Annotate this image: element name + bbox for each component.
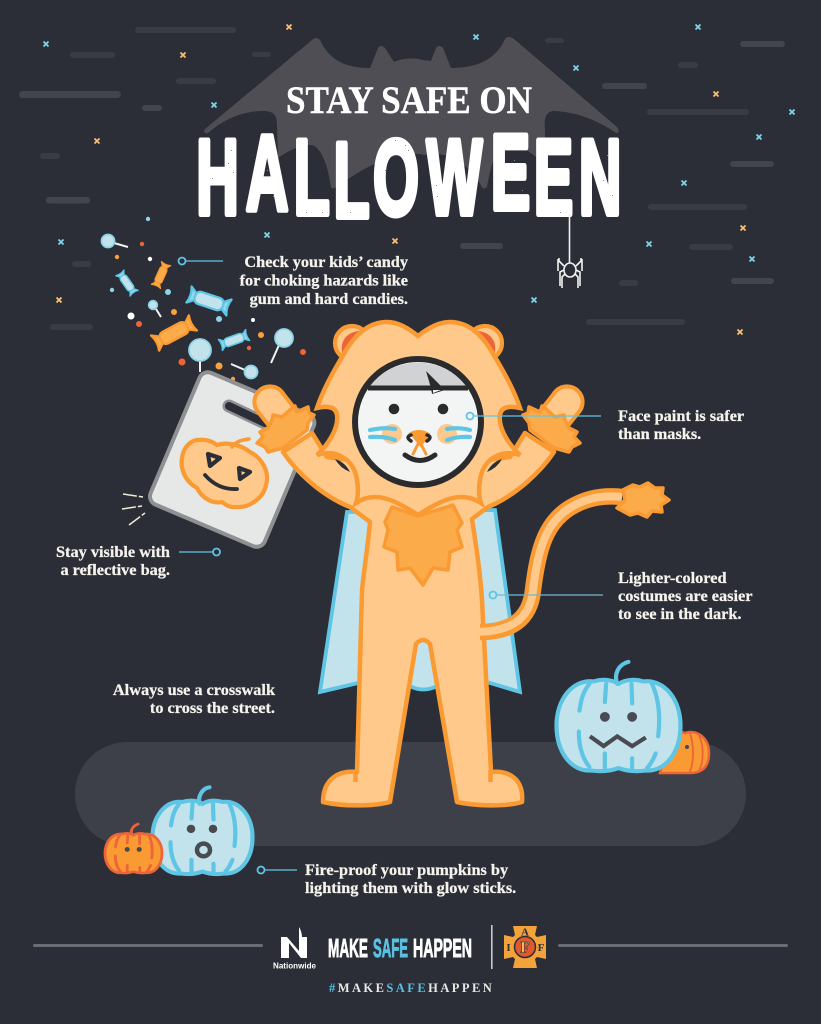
- face paint stripes: [370, 428, 470, 440]
- wrapped candies: [116, 262, 250, 351]
- callout: face paint: [466, 406, 744, 443]
- cape: [320, 510, 520, 692]
- candy spill: [102, 217, 306, 381]
- callout: reflective bag: a reflective bag.: [60, 560, 170, 579]
- logo: IAFF maltese cross: F: [538, 942, 545, 954]
- callout: lighter costumes: Lighter-colored: [618, 568, 727, 587]
- callout: candy check: gum and hard candies.: [250, 289, 408, 308]
- logo: IAFF maltese cross: I: [506, 942, 511, 954]
- kid in lion costume: [254, 322, 669, 805]
- ground: rounded street: [75, 742, 746, 846]
- mouth: [405, 455, 435, 460]
- lion tail: [474, 496, 622, 632]
- hashtag: #MAKESAFEHAPPEN: [329, 981, 494, 995]
- callout: lighter costumes: [490, 568, 752, 623]
- eyes: [389, 404, 448, 414]
- face: [354, 358, 482, 486]
- orange pumpkin: [660, 732, 709, 773]
- suit body, arms and legs: [283, 433, 554, 805]
- callout: glow sticks: [258, 860, 516, 897]
- nose and whiskers: [410, 432, 428, 454]
- left finger: [254, 386, 292, 430]
- callout: crosswalk: Always use a crosswalk: [113, 680, 276, 699]
- logo: Make Safe Happen: SAFE: [373, 933, 408, 963]
- callout: crosswalk: to cross the street.: [150, 698, 275, 717]
- callout: lighter costumes: to see in the dark.: [618, 604, 741, 623]
- logo: Make Safe Happen: HAPPEN: [413, 933, 472, 963]
- reflective trick-or-treat bag: [122, 369, 317, 550]
- callout: glow sticks: Fire-proof your pumpkins by: [305, 860, 508, 879]
- callout: reflective bag: [56, 542, 220, 579]
- callout: face paint: than masks.: [618, 424, 701, 443]
- callout: reflective bag: Stay visible with: [56, 542, 170, 561]
- cheeks: [382, 424, 457, 444]
- orange pumpkin: [105, 824, 162, 873]
- logo: Make Safe Happen: MAKE: [328, 933, 368, 963]
- callout: face paint: Face paint is safer: [618, 406, 744, 425]
- callout: candy check: for choking hazards like: [240, 270, 408, 290]
- callout: glow sticks: lighting them with glow sticks.: [305, 878, 516, 897]
- lollipops: [102, 234, 293, 378]
- logo: Make Safe Happen: [328, 933, 472, 963]
- tail tuft: [617, 483, 669, 517]
- logo: IAFF maltese cross: A: [521, 926, 529, 938]
- arm gaps: [335, 459, 502, 472]
- icon: bag pumpkin face: [182, 439, 267, 507]
- lion ears: [335, 326, 502, 360]
- subtitle: Stay Safe On: STAY SAFE ON: [286, 79, 532, 122]
- callout: candy check: Check your kids’ candy: [244, 252, 408, 271]
- bat silhouette: [204, 37, 619, 188]
- chest mane: [384, 505, 462, 585]
- title: Halloween: HALLOWEEN: [196, 114, 621, 241]
- blue pumpkin: [556, 662, 680, 771]
- lion hood: [317, 322, 520, 515]
- blue pumpkin with orange pumpkin, right: [556, 662, 709, 773]
- lollipop sticks: [114, 243, 279, 372]
- logo: IAFF maltese cross: F: [520, 940, 530, 956]
- callout: candy check: [178, 252, 408, 308]
- logo: IAFF maltese cross: [504, 926, 546, 968]
- callout: lighter costumes: costumes are easier: [618, 586, 752, 605]
- ankle marks: [356, 770, 490, 782]
- spider on thread: [558, 214, 582, 288]
- right finger: [545, 386, 582, 430]
- logo: Nationwide: [273, 927, 316, 970]
- left mitt: [257, 406, 314, 452]
- blue and orange pumpkins, left: [105, 787, 252, 874]
- logo: Nationwide: Nationwide: [273, 960, 316, 970]
- reflection sparkle lines: [122, 494, 145, 525]
- blue pumpkin: [152, 787, 252, 874]
- right mitt: [523, 406, 580, 452]
- hair: [368, 363, 468, 388]
